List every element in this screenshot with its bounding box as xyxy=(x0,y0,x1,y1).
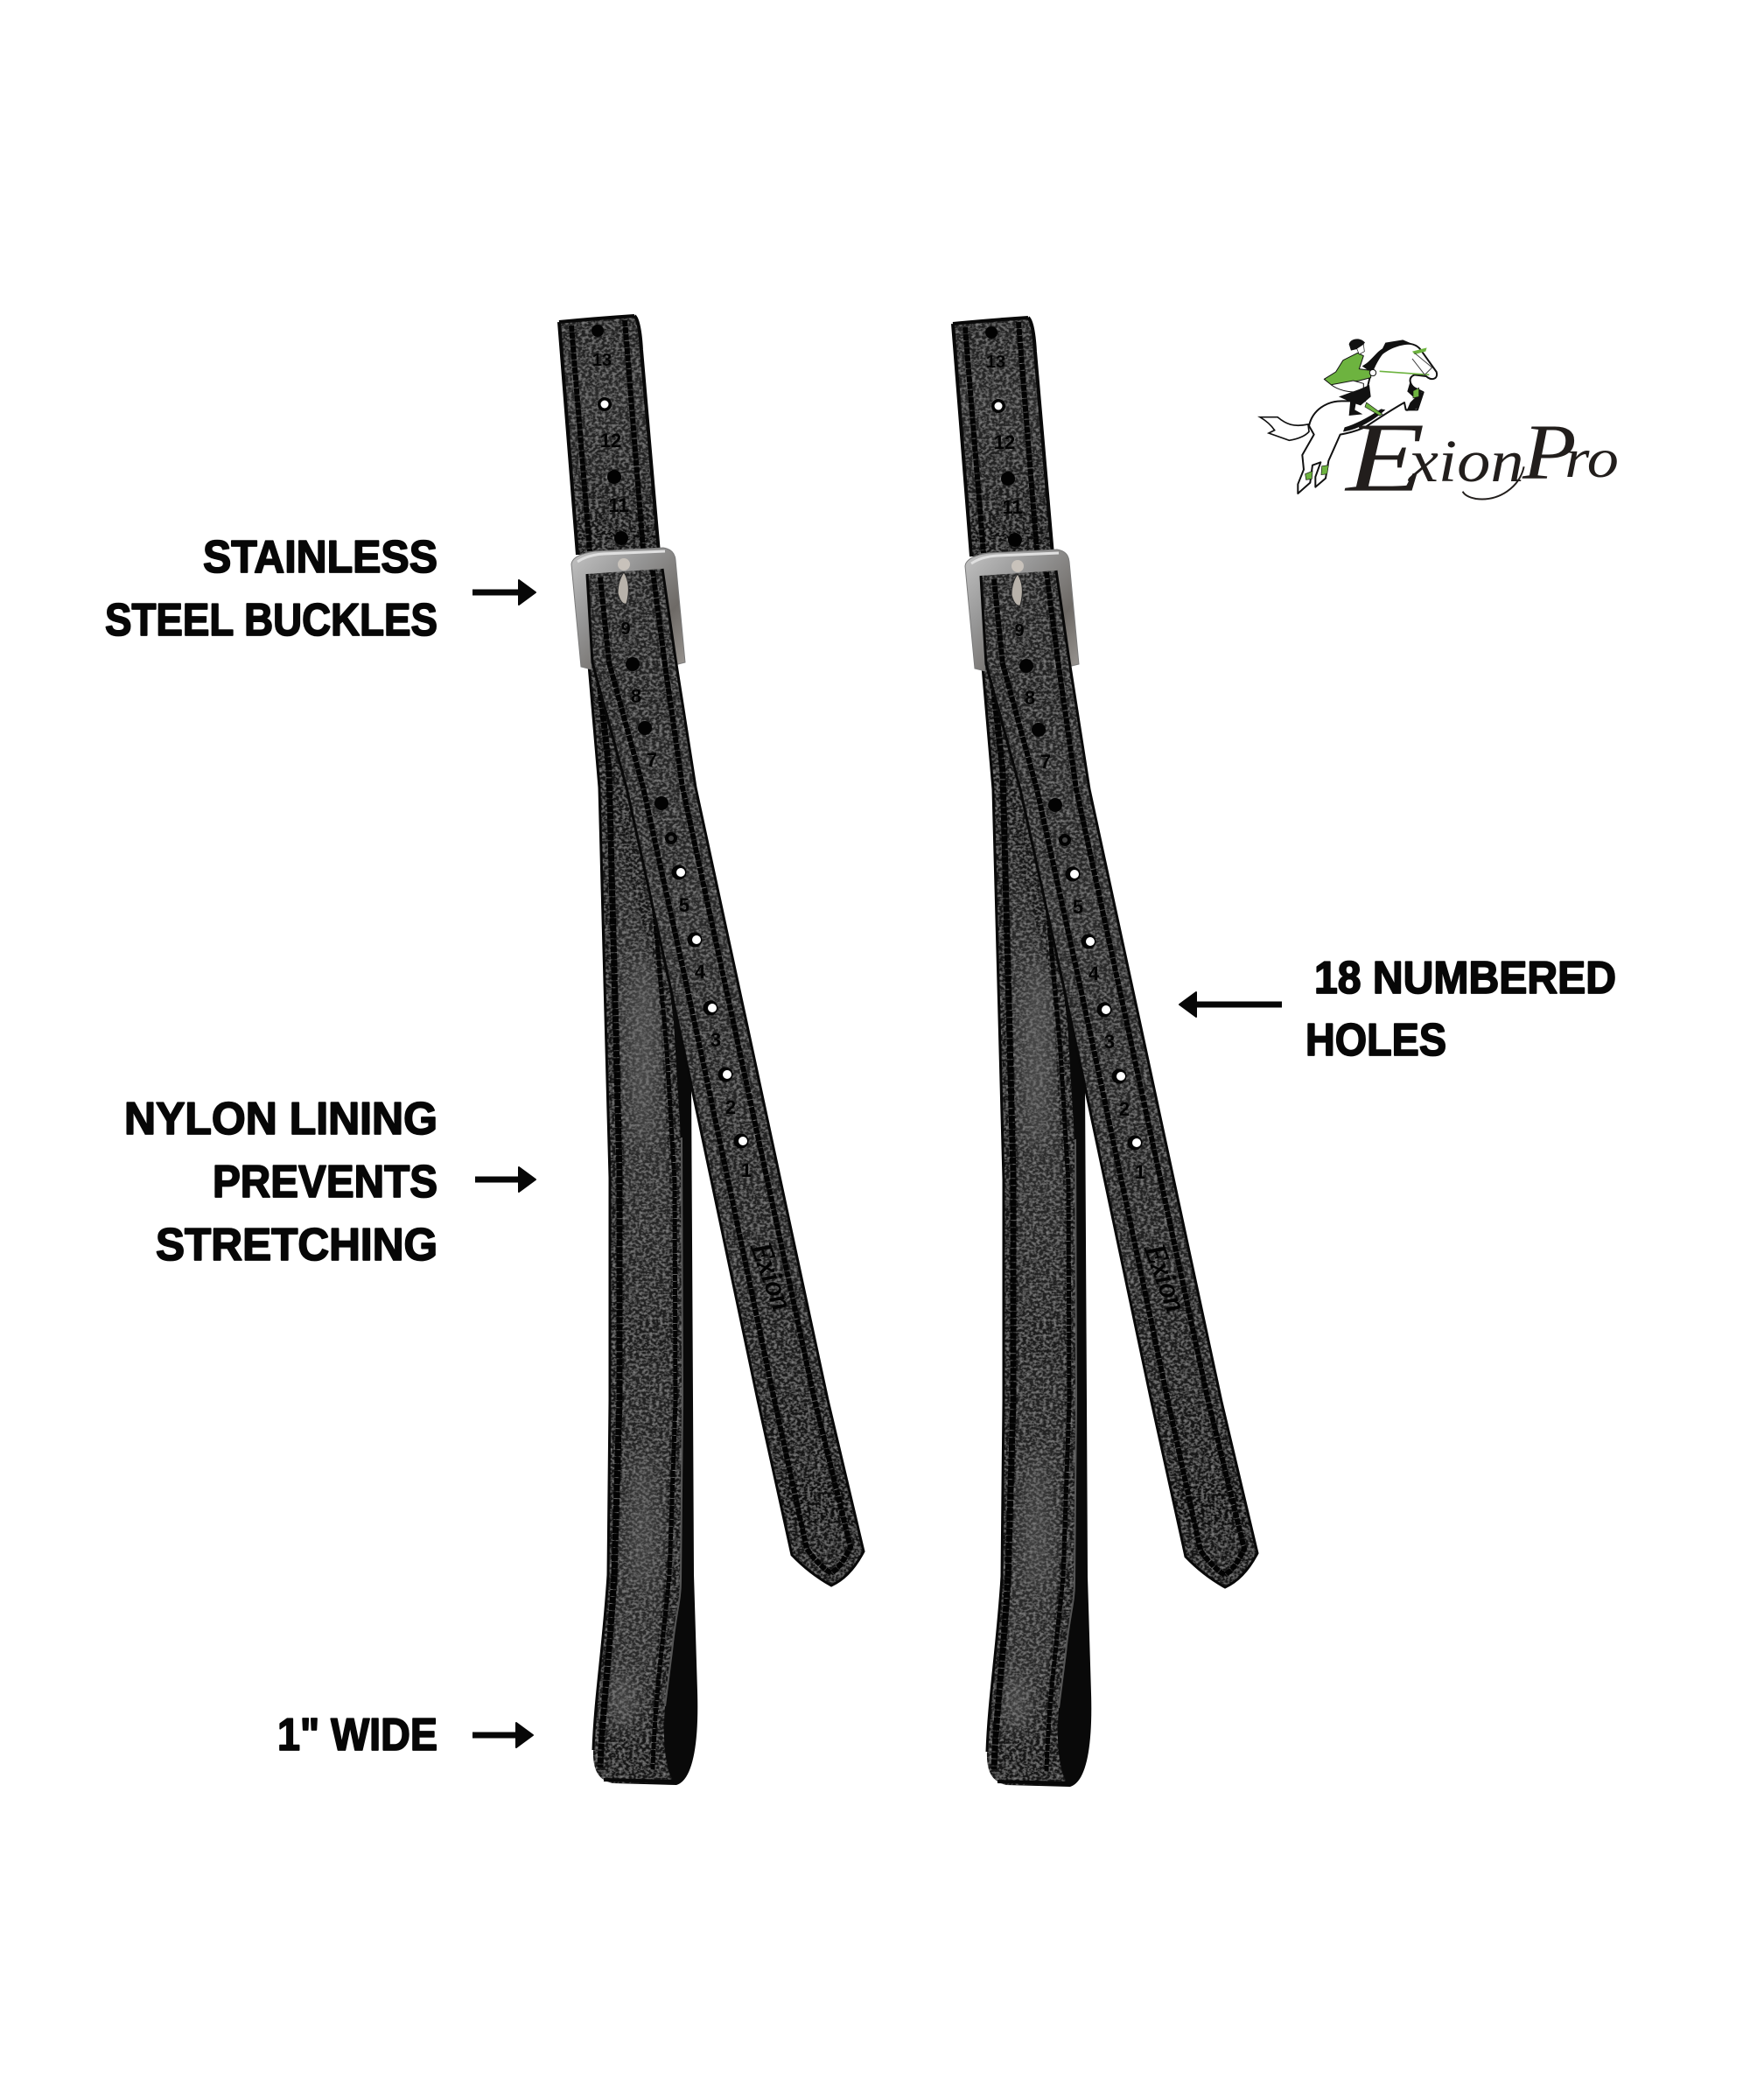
logo wordmark: P xyxy=(1522,410,1577,496)
icon: rider xyxy=(1324,339,1376,416)
logo wordmark: ro xyxy=(1564,428,1619,489)
label: 1 inch wide: 1" WIDE xyxy=(277,1710,438,1760)
logo wordmark: xion xyxy=(1408,428,1524,494)
upper strap section above buckle: 11 xyxy=(608,494,629,516)
label: stainless steel buckles xyxy=(105,532,438,646)
logo wordmark: E xyxy=(1344,402,1424,513)
arrow: to buckle xyxy=(472,580,536,605)
holes and numbers xyxy=(620,620,798,1314)
label: nylon lining prevents stretching: PREVENTS xyxy=(213,1157,438,1208)
label: stainless steel buckles: STAINLESS xyxy=(203,532,438,583)
arrow: to strap width xyxy=(472,1723,533,1747)
holes and numbers: 7 xyxy=(647,749,657,771)
holes and numbers: 1 xyxy=(741,1159,752,1181)
label: stainless steel buckles: STEEL BUCKLES xyxy=(105,595,438,646)
holes and numbers: Exion xyxy=(744,1237,798,1314)
label: 18 numbered holes: HOLES xyxy=(1306,1015,1446,1066)
holes and numbers: 4 xyxy=(695,961,706,983)
label: nylon lining prevents stretching: STRETCHING xyxy=(156,1220,438,1270)
holes and numbers: 5 xyxy=(679,894,690,916)
stitching xyxy=(598,674,620,1768)
holes and numbers: 9 xyxy=(620,620,631,639)
loop back layer xyxy=(612,700,697,1785)
label: 18 numbered holes xyxy=(1306,953,1616,1066)
right stirrup leather strap xyxy=(953,318,1257,1787)
upper strap section above buckle: 13 xyxy=(592,351,612,370)
holes and numbers: 3 xyxy=(710,1029,721,1051)
upper strap section above buckle: 12 xyxy=(600,430,621,452)
holes and numbers: 2 xyxy=(725,1096,736,1118)
holes and numbers: 8 xyxy=(631,685,641,707)
buckle pin xyxy=(618,572,628,604)
arrow: to nylon lining xyxy=(475,1167,536,1192)
left stirrup leather strap xyxy=(559,316,864,1785)
lower strap tongue with numbered holes xyxy=(587,569,864,1586)
icon: horse xyxy=(1260,340,1437,494)
stitching xyxy=(600,578,831,1573)
upper strap section above buckle xyxy=(559,316,659,555)
main strap face xyxy=(589,665,682,1783)
arrow: to numbered holes xyxy=(1180,992,1282,1017)
label: nylon lining prevents stretching: NYLON LINING xyxy=(124,1094,438,1144)
label: 18 numbered holes: 18 NUMBERED xyxy=(1314,953,1616,1004)
logo: ExionPro horse and rider xyxy=(1260,339,1619,513)
logo wordmark xyxy=(1344,402,1619,513)
label: nylon lining prevents stretching xyxy=(124,1094,438,1270)
stainless steel buckle xyxy=(571,548,685,669)
